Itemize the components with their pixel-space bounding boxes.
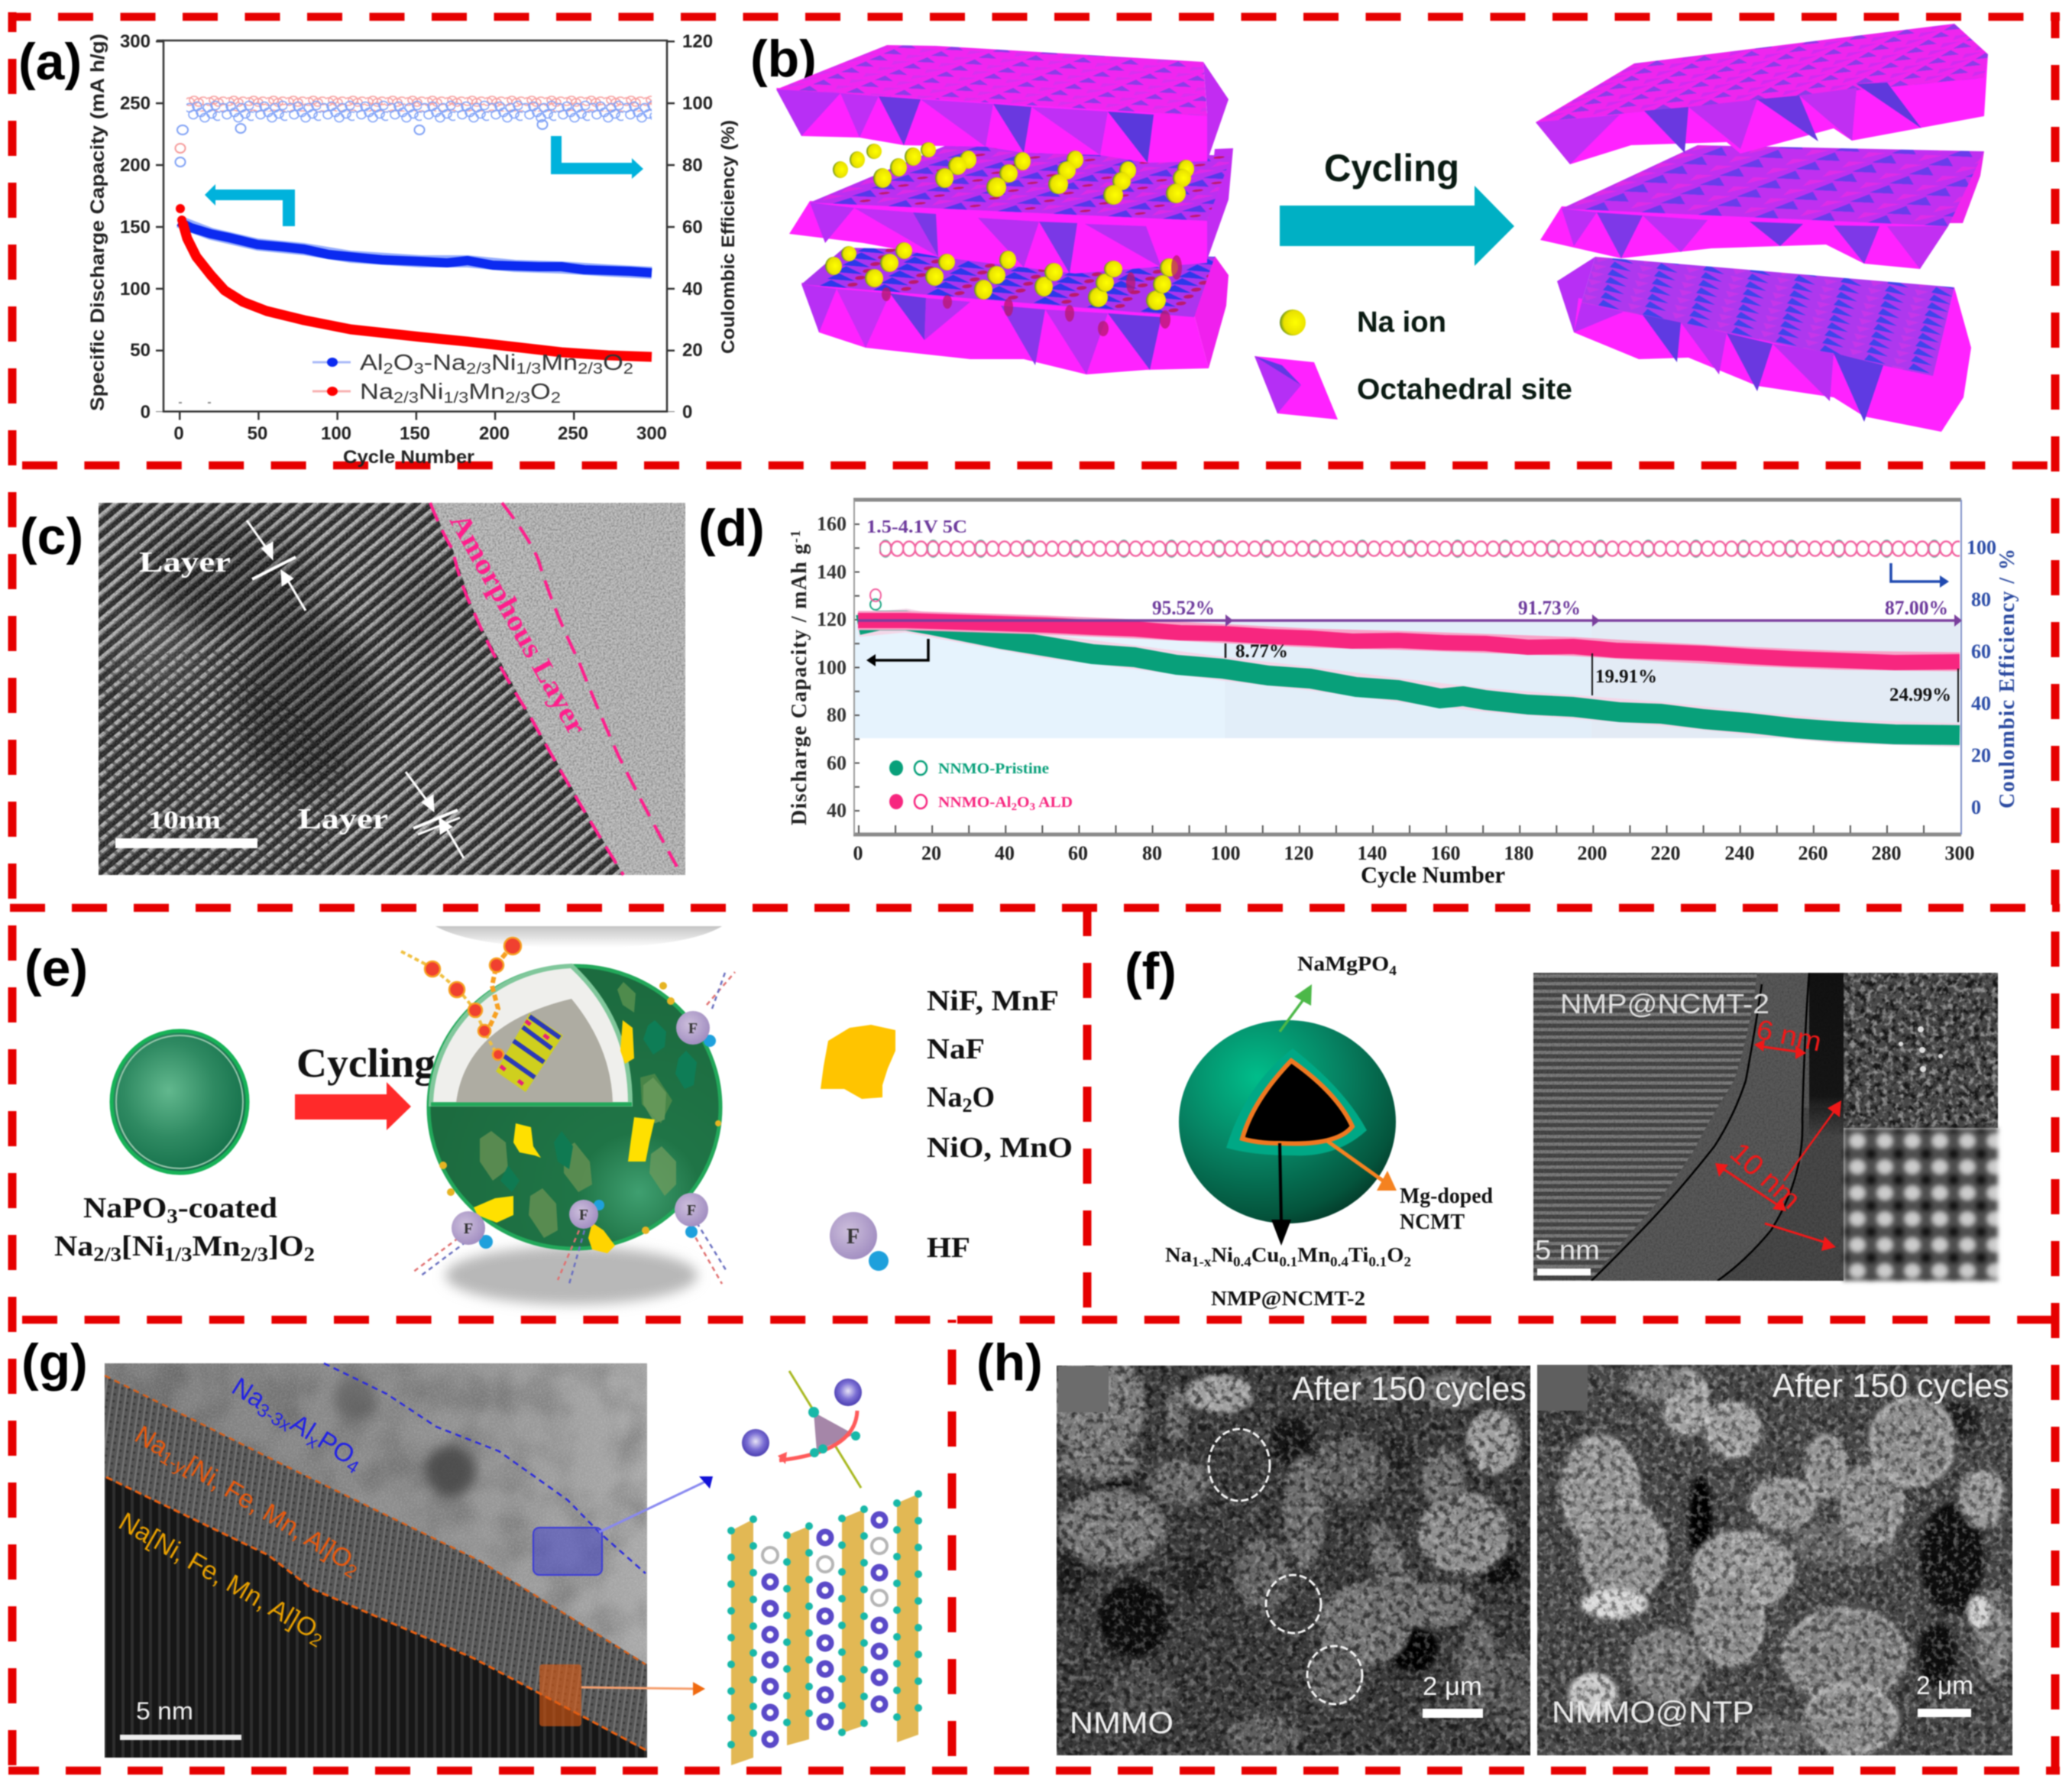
phase label orange: Na <box>130 1420 173 1462</box>
legend: product names: NiO, MnO <box>927 1132 1073 1164</box>
left top layer <box>776 45 1229 163</box>
left axis tick labels <box>120 31 151 423</box>
legend: HF molecule: F <box>847 1225 860 1249</box>
layer label bottom: Layer <box>298 803 388 835</box>
HF molecules with dashed trails <box>413 971 735 1284</box>
coated particle caption: 2 <box>304 1243 315 1265</box>
layered crystal structure <box>731 1494 918 1765</box>
x axis labels: 180 <box>1504 842 1534 864</box>
x axis tick labels: 250 <box>558 423 588 444</box>
panel d: capacity retention chart <box>698 499 2019 888</box>
phase label blue: PO <box>312 1426 360 1470</box>
x axis tick labels <box>173 423 667 444</box>
x axis title: Cycle Number <box>343 447 474 468</box>
sample label NMMO@NTP: NMMO@NTP <box>1552 1696 1754 1729</box>
Mg-doped arrow and label: NCMT <box>1400 1210 1465 1234</box>
coated particle caption: 3 <box>167 1205 178 1227</box>
plot frame <box>853 500 1961 834</box>
right axis labels: 0 <box>1971 796 1981 818</box>
panel b: octahedral layers before and after cycling <box>750 24 1988 432</box>
x axis labels: 280 <box>1872 842 1901 864</box>
SEM image NMMO <box>1051 1351 1537 1755</box>
phase label blue: x <box>303 1431 322 1453</box>
left axis tick labels: 200 <box>120 155 151 176</box>
10 nm annotation <box>1715 1100 1841 1251</box>
right axis tick labels: 120 <box>682 31 713 52</box>
panel label e: (e) <box>24 939 88 997</box>
panel f: NaMgPO4 coated particle and TEM <box>1125 942 1998 1310</box>
TEM micrograph <box>99 503 685 875</box>
HF molecules with dashed trails: F <box>464 1220 473 1237</box>
legend: Na ion: Na ion <box>1357 306 1446 339</box>
core arrow and formula: Cu <box>1251 1243 1279 1266</box>
legend: O <box>393 351 413 375</box>
x axis labels: 260 <box>1798 842 1828 864</box>
x axis labels: 220 <box>1650 842 1681 864</box>
coulombic efficiency markers <box>870 537 1960 610</box>
legend pristine: NNMO-Pristine <box>938 760 1049 777</box>
legend: Al <box>360 351 380 375</box>
orange dashed boundary lower <box>106 1477 646 1750</box>
x axis labels: 20 <box>921 842 941 864</box>
legend: yellow product <box>821 1025 895 1099</box>
crystal block <box>496 1013 563 1092</box>
right axis tick labels: 40 <box>682 279 703 300</box>
layer arrows top <box>247 520 306 611</box>
left axis tick labels: 0 <box>141 402 151 423</box>
phase label amber: 2 <box>306 1628 325 1652</box>
scale bar 10nm <box>115 806 257 848</box>
legend: product names <box>927 985 1073 1164</box>
left axis labels: 40 <box>827 799 847 821</box>
panel label h: (h) <box>976 1333 1043 1392</box>
core arrow and formula: 2 <box>1403 1254 1411 1269</box>
legend: product names: O <box>972 1081 995 1113</box>
legend: O <box>530 380 551 404</box>
legend: 1/3 <box>516 361 541 378</box>
coated particle caption: 2/3 <box>93 1243 121 1265</box>
right bottom layer <box>1557 257 1971 432</box>
legend: 2/3 <box>393 390 419 407</box>
left axis tick labels: 250 <box>120 93 151 114</box>
x axis labels: 80 <box>1142 842 1162 864</box>
right axis labels: 80 <box>1971 588 1991 611</box>
left axis tick labels: 50 <box>130 340 151 361</box>
right axis labels: 100 <box>1967 536 1996 559</box>
core arrow and formula: 0.4 <box>1330 1254 1348 1269</box>
blue axis arrow <box>1891 563 1949 588</box>
panel a: cycling capacity chart <box>18 31 739 468</box>
retention line with percentages: 91.73% <box>1518 597 1581 619</box>
x axis labels: 120 <box>1284 842 1314 864</box>
coulombic efficiency series <box>176 95 652 167</box>
phase label orange: 2 <box>341 1560 361 1583</box>
phase label blue: 4 <box>343 1455 362 1478</box>
capacity gap annotations <box>1225 641 1958 722</box>
panel label d: (d) <box>698 499 765 557</box>
orange selection box and arrow <box>539 1664 705 1726</box>
right axis tick labels <box>682 31 713 423</box>
coated particle caption: NaPO <box>83 1192 159 1224</box>
blue capacity curve <box>179 222 652 273</box>
core shell sphere <box>1179 1020 1396 1223</box>
x axis tick labels: 150 <box>400 423 430 444</box>
coated particle caption: 1/3 <box>164 1243 193 1265</box>
left axis labels: 140 <box>817 561 847 583</box>
crimson site markers <box>882 255 1182 336</box>
legend: 1/3 <box>443 390 468 407</box>
caption after 150 cycles left: After 150 cycles <box>1292 1370 1526 1408</box>
core arrow and formula: Mn <box>1297 1243 1330 1266</box>
left axis labels: 60 <box>827 752 847 774</box>
core arrow and formula <box>1165 1143 1411 1269</box>
coated particle caption: 2/3 <box>240 1243 268 1265</box>
legend: Mn <box>541 351 578 375</box>
stray dots <box>179 402 211 403</box>
x axis tick labels: 200 <box>479 423 510 444</box>
legend: -Na <box>424 351 467 375</box>
right axis labels: 60 <box>1971 640 1991 663</box>
layer arrows bottom <box>406 772 464 858</box>
core arrow and formula: 0.4 <box>1233 1254 1251 1269</box>
amorphous layer label: Amorphous Layer <box>443 508 593 740</box>
x axis labels: 240 <box>1725 842 1754 864</box>
core arrow and formula: 0.1 <box>1368 1254 1387 1269</box>
capacity gap annotations: 24.99% <box>1889 685 1951 705</box>
phase label blue: Al <box>285 1408 320 1446</box>
phase label amber: Na[Ni, Fe, Mn, Al]O <box>114 1507 322 1644</box>
coated particle caption <box>54 1192 315 1265</box>
SEM image NMMO@NTP <box>1536 1363 2012 1755</box>
shaded retention regions <box>855 622 1960 738</box>
x axis labels: 140 <box>1357 842 1387 864</box>
left sodium ions <box>825 142 1194 310</box>
left bottom layer <box>801 248 1229 374</box>
x axis labels: 0 <box>853 842 863 864</box>
6 nm annotation: 6 nm <box>1753 1013 1824 1058</box>
scale bar left: 2 μm <box>1423 1672 1482 1701</box>
arrow pointing to right axis <box>551 136 643 179</box>
right top layer <box>1536 24 1988 164</box>
panel label b: (b) <box>750 30 817 88</box>
legend coated <box>889 794 1073 813</box>
left axis tick labels: 150 <box>120 217 151 238</box>
TEM sample label: NMP@NCMT-2 <box>1560 988 1769 1019</box>
coated particle caption: Mn <box>193 1230 240 1262</box>
red orange degradation chains <box>401 938 521 1060</box>
legend coated: 2 <box>1012 802 1017 813</box>
x axis labels: 100 <box>1210 842 1241 864</box>
x axis labels: 200 <box>1577 842 1607 864</box>
cycling label: Cycling <box>1324 147 1459 190</box>
legend coated: O <box>1017 794 1030 811</box>
legend: Na <box>360 380 388 404</box>
x axis tick labels: 50 <box>248 423 267 444</box>
cycling label: Cycling <box>296 1040 435 1086</box>
blue selection box and arrow <box>533 1476 713 1575</box>
TEM micrograph <box>105 1363 647 1758</box>
coated particle caption: -coated <box>178 1192 277 1224</box>
retention line with percentages: 95.52% <box>1152 597 1215 619</box>
dashed circles on cracks <box>1209 1429 1362 1704</box>
pristine capacity curve <box>858 621 1960 735</box>
legend coated: 3 <box>1030 802 1035 813</box>
sample label NMMO: NMMO <box>1070 1706 1174 1740</box>
legend: product names: 2 <box>962 1094 972 1116</box>
panel label c: (c) <box>20 507 83 565</box>
right axis title: Coulombic Efficiency / % <box>1996 549 2019 809</box>
legend: Ni <box>419 380 443 404</box>
right axis tick labels: 100 <box>682 93 713 114</box>
right axis labels: 20 <box>1971 744 1991 766</box>
coated capacity curve <box>858 621 1960 663</box>
atomic lattice inset <box>1844 1128 1998 1281</box>
legend: O <box>603 351 623 375</box>
left axis labels: 80 <box>827 704 847 726</box>
core arrow and formula: Ni <box>1211 1243 1233 1266</box>
voltage and rate note: 1.5-4.1V 5C <box>866 517 967 537</box>
left axis tick labels: 300 <box>120 31 151 52</box>
core arrow and formula: 0.1 <box>1279 1254 1297 1269</box>
x axis labels <box>853 842 1974 864</box>
blue dashed boundary <box>324 1363 646 1573</box>
amorphous layer dashed boundaries <box>430 503 677 875</box>
x axis title: Cycle Number <box>1361 861 1505 888</box>
sample name: NMP@NCMT-2 <box>1211 1287 1365 1310</box>
x axis tick labels: 100 <box>321 423 351 444</box>
legend coated: NNMO-Al <box>938 794 1007 811</box>
legend: 2/3 <box>505 390 530 407</box>
x axis labels: 60 <box>1068 842 1088 864</box>
TEM micrograph <box>1533 973 1844 1281</box>
right axis tick labels: 20 <box>682 340 703 361</box>
right axis tick labels: 80 <box>682 155 703 176</box>
y axis title right: Coulombic Efficiency (%) <box>718 120 739 354</box>
panel label a: (a) <box>18 33 82 91</box>
scale bar right: 2 μm <box>1916 1671 1973 1700</box>
legend: 2/3 <box>578 361 603 378</box>
NaMgPO4 arrow and label: NaMgPO <box>1297 952 1381 975</box>
legend: HF molecule: HF <box>927 1232 970 1264</box>
legend coated: ALD <box>1035 794 1073 811</box>
cycling arrow <box>295 1082 411 1130</box>
left axis title: -1 <box>788 530 803 543</box>
panel e: NaPO3 coated particle schematic <box>24 926 1073 1304</box>
HF molecules with dashed trails: F <box>687 1202 696 1219</box>
phase label blue: 3-3x <box>254 1399 294 1436</box>
legend: Na ion <box>1280 306 1446 339</box>
left middle layer <box>789 145 1233 274</box>
phase label orange: 1-y <box>157 1447 189 1478</box>
left layered structure <box>776 45 1233 374</box>
legend: product names: NaF <box>927 1033 985 1065</box>
x axis labels: 160 <box>1430 842 1461 864</box>
right layered structure <box>1536 24 1988 432</box>
left axis labels: 100 <box>817 656 847 679</box>
HF molecules with dashed trails: F <box>579 1207 588 1223</box>
right middle layer <box>1540 145 1984 269</box>
legend: 2 <box>551 390 561 407</box>
left axis tick labels: 100 <box>120 279 151 300</box>
NaMgPO4 arrow and label <box>1280 952 1397 1032</box>
layer label top: Layer <box>139 546 231 578</box>
core arrow and formula: Ti <box>1348 1243 1369 1266</box>
scale bar 10nm: 10nm <box>148 806 221 834</box>
legend: 2/3 <box>466 361 491 378</box>
left axis labels: 120 <box>817 608 847 630</box>
legend: product names: Na <box>927 1081 962 1113</box>
scale bar left <box>1423 1672 1483 1718</box>
scale bar 5 nm: 5 nm <box>1535 1234 1600 1265</box>
capacity gap annotations: 19.91% <box>1595 666 1657 687</box>
10 nm annotation: 10 nm <box>1724 1136 1806 1216</box>
arrow pointing to left axis <box>205 184 295 226</box>
y axis title left: Specific Discharge Capacity (mA h/g) <box>87 34 108 411</box>
FFT inset <box>1844 973 1998 1128</box>
scale bar 5 nm <box>120 1697 241 1740</box>
retention line with percentages <box>858 597 1962 627</box>
scale bar 5 nm: 5 nm <box>136 1697 193 1725</box>
phase label blue: Na <box>227 1372 270 1414</box>
panel label g: (g) <box>21 1333 88 1392</box>
coated particle caption: [Ni <box>121 1230 164 1262</box>
legend: product names: NiF, MnF <box>927 985 1059 1017</box>
panel label f: (f) <box>1125 942 1177 1000</box>
coated particle <box>112 1031 248 1173</box>
scale bar right <box>1916 1671 1973 1717</box>
right axis tick labels: 60 <box>682 217 703 238</box>
legend: HF molecule <box>830 1212 970 1271</box>
legend: 2 <box>384 361 393 378</box>
left axis labels: 160 <box>817 513 847 535</box>
panel g: TEM with interfacial layers and crystal structure <box>21 1333 918 1765</box>
panel c: TEM image with amorphous layer <box>20 503 685 875</box>
core arrow and formula: 1-x <box>1192 1254 1211 1269</box>
legend: 3 <box>413 361 424 378</box>
x axis tick labels: 0 <box>173 423 184 444</box>
orange dashed boundary upper <box>105 1376 646 1664</box>
x axis labels: 40 <box>995 842 1015 864</box>
coated particle caption: ]O <box>268 1230 304 1262</box>
x axis tick labels: 300 <box>636 423 667 444</box>
retention line with percentages: 87.00% <box>1885 597 1948 619</box>
coordination detail icon <box>742 1371 862 1488</box>
core arrow and formula: O <box>1387 1243 1403 1266</box>
right axis labels <box>1967 536 1996 818</box>
legend: octahedral site <box>1255 356 1572 420</box>
Mg-doped arrow and label <box>1327 1141 1493 1234</box>
legend: Ni <box>491 351 516 375</box>
caption after 150 cycles right: After 150 cycles <box>1773 1367 2009 1405</box>
legend: octahedral site: Octahedral site <box>1357 374 1572 406</box>
legend <box>312 351 633 407</box>
legend: Mn <box>468 380 505 404</box>
NaMgPO4 arrow and label: 4 <box>1389 963 1397 978</box>
legend pristine <box>889 760 1049 777</box>
red capacity curve <box>176 204 652 357</box>
left axis title: Discharge Capacity / mAh g <box>788 544 811 825</box>
legend: 2 <box>623 361 633 378</box>
black axis arrow <box>866 639 928 666</box>
panel h: SEM images after 150 cycles <box>976 1333 2012 1755</box>
x axis labels: 300 <box>1945 842 1974 864</box>
core arrow and formula: Na <box>1165 1243 1190 1266</box>
phase label orange: [Ni, Fe, Mn, Al]O <box>180 1450 358 1575</box>
coated particle caption: Na <box>54 1230 89 1262</box>
capacity gap annotations: 8.77% <box>1235 641 1288 662</box>
HF molecules with dashed trails: F <box>688 1020 698 1037</box>
Mg-doped arrow and label: Mg-doped <box>1400 1184 1493 1208</box>
right axis tick labels: 0 <box>682 402 692 423</box>
chart axes and ticks <box>157 41 671 416</box>
degraded particle cutaway <box>429 966 721 1253</box>
cycling arrow <box>1280 186 1514 266</box>
shadows <box>435 926 722 1304</box>
right axis labels: 40 <box>1971 692 1991 715</box>
left axis labels <box>817 513 847 821</box>
